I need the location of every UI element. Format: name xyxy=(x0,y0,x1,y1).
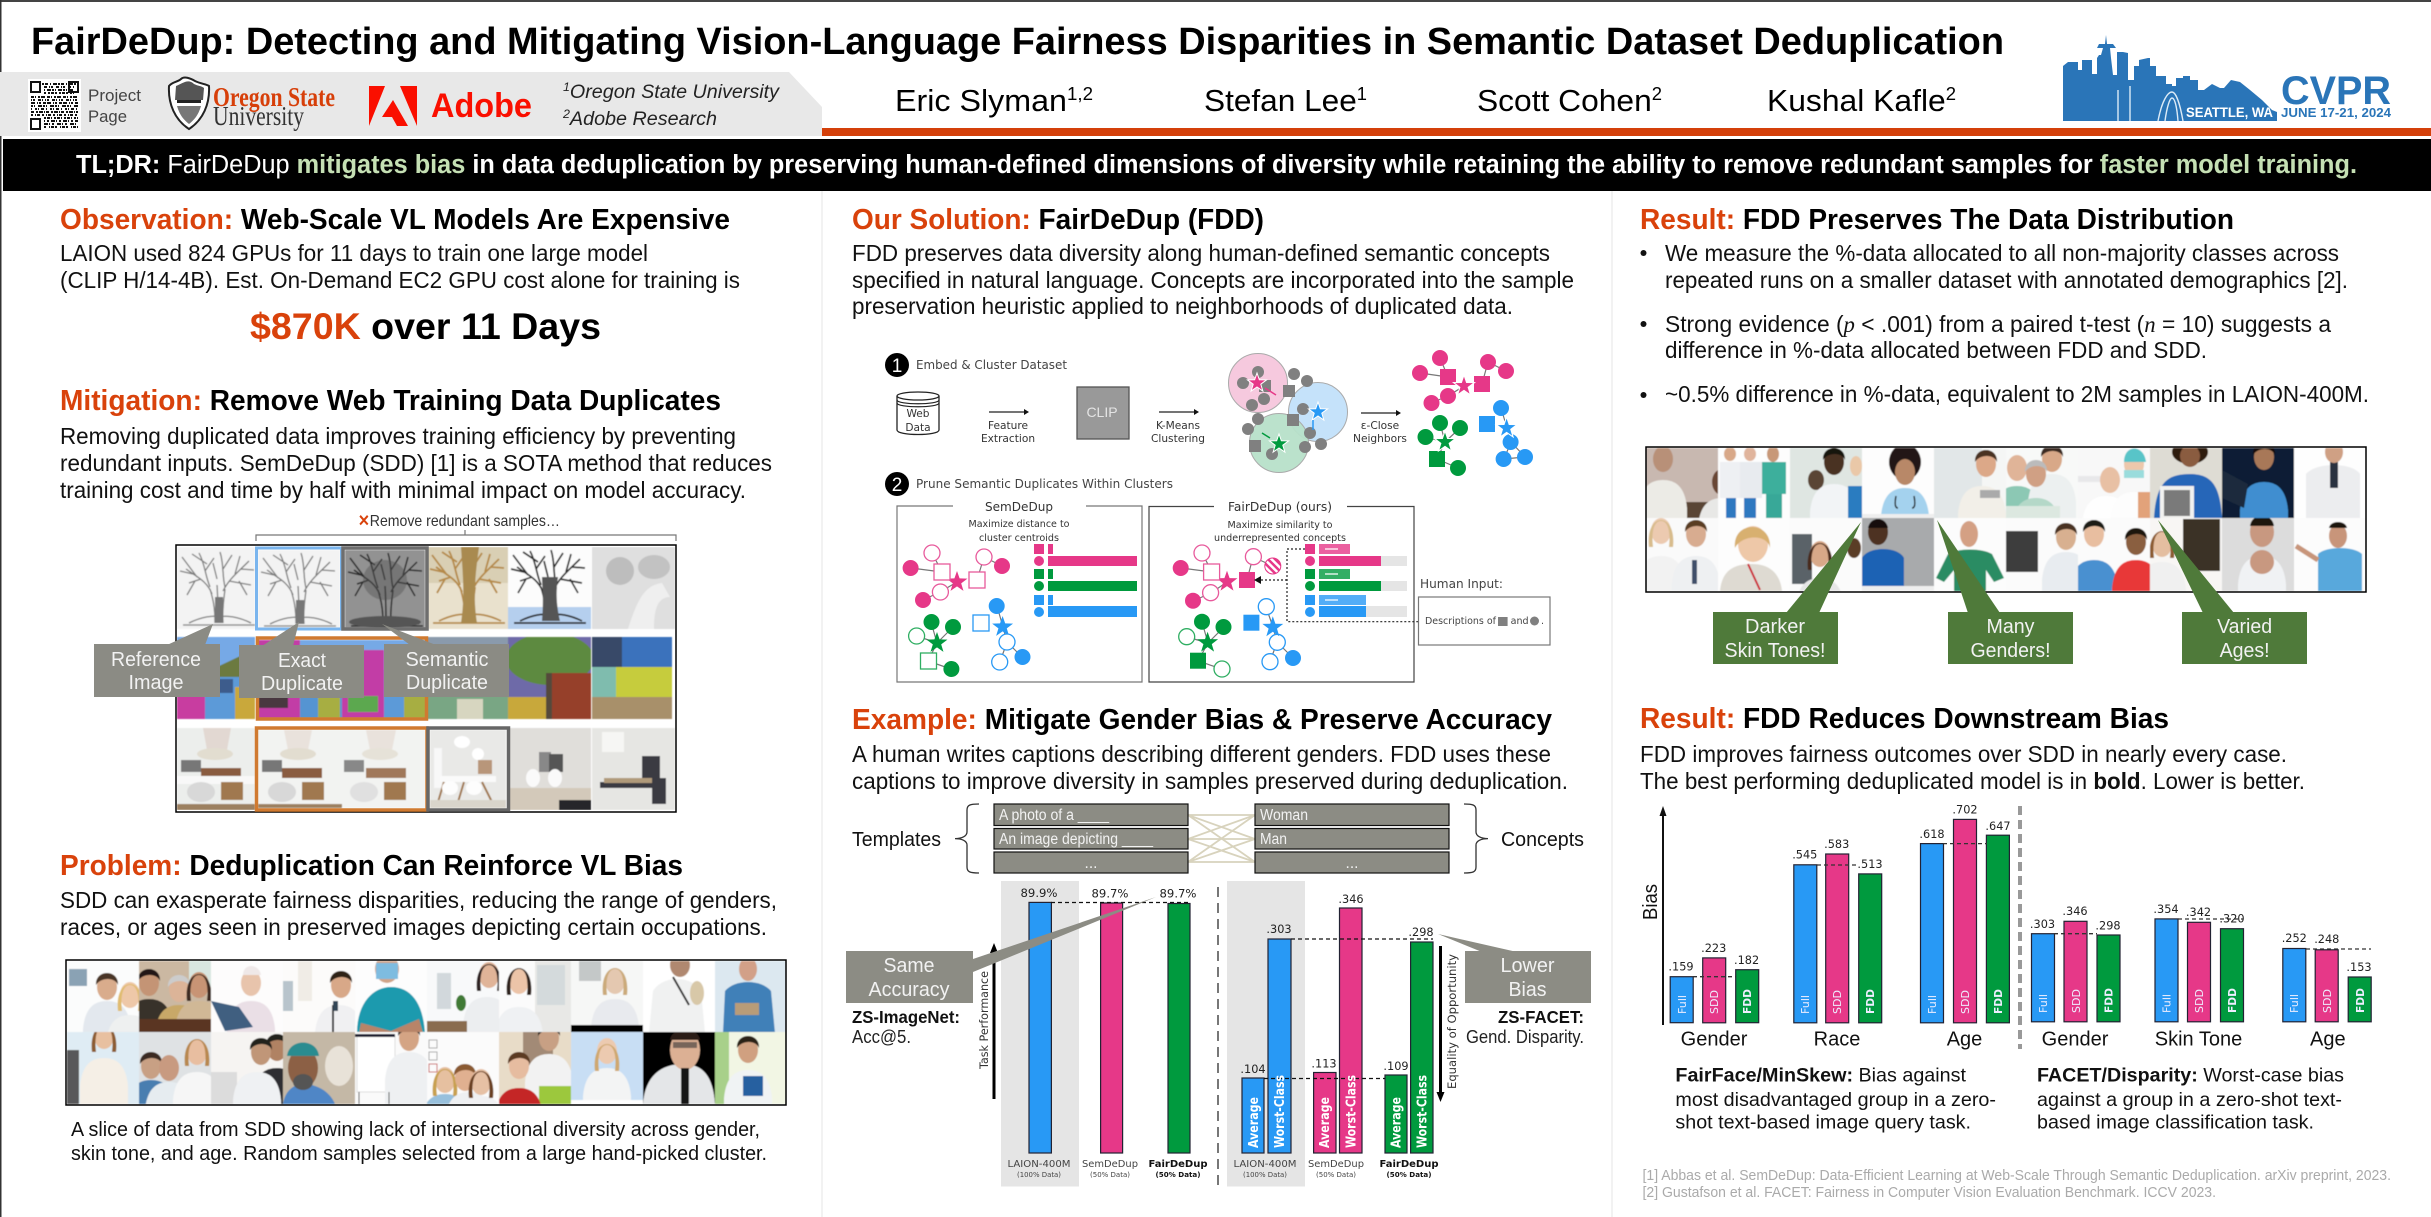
callout: darker skin tones: Darker xyxy=(1745,616,1805,638)
chart: fairness: .113 xyxy=(1311,1058,1337,1070)
chart: fairness: .298 xyxy=(1408,926,1434,939)
project page label xyxy=(88,86,141,126)
bullet list: difference in %-data allocated between FDD and SDD. xyxy=(1665,337,2207,363)
chart: FACET bars: FDD xyxy=(2226,988,2239,1013)
chart: FairFace bars: Age xyxy=(1947,1029,1982,1051)
bias result body: FDD improves fairness outcomes over SDD in nearly every case. xyxy=(1640,741,2287,767)
chart: FairFace bars: SDD xyxy=(1959,990,1972,1014)
chart: fairness: Average xyxy=(1390,1097,1404,1148)
chart: accuracy: 89.7% xyxy=(1160,887,1197,900)
chart: fairness: .346 xyxy=(1338,893,1364,906)
chart: fairness: Worst-Class xyxy=(1416,1075,1430,1148)
chart: FACET bars: SDD xyxy=(2193,989,2206,1013)
ZS-FACET label: ZS-FACET: xyxy=(1498,1007,1584,1027)
chart: FACET bars: Full xyxy=(2037,994,2050,1013)
arrow: k-means clustering xyxy=(1151,409,1205,445)
chart: FACET bars: Full xyxy=(2160,994,2174,1013)
project page label: Project xyxy=(88,86,141,105)
callout: exact duplicate: Duplicate xyxy=(261,673,343,695)
bias result body xyxy=(1640,741,2305,794)
authors: 2 xyxy=(1652,84,1662,104)
panel: observation xyxy=(60,204,740,347)
chart: fairness: .104 xyxy=(1240,1063,1266,1076)
chart: FACET bars xyxy=(2030,903,2372,1051)
chart: FACET bars: .298 xyxy=(2095,919,2121,932)
FairFace description: most disadvantaged group in a zero- xyxy=(1675,1089,1996,1111)
callout: exact duplicate: Exact xyxy=(278,650,326,672)
chart: FairFace bars: FDD xyxy=(1864,989,1877,1014)
icon: web data cylinder xyxy=(897,392,939,434)
chart: FairFace bars: .545 xyxy=(1792,849,1817,862)
concept boxes: Woman xyxy=(1260,807,1308,824)
arrow: equality of opportunity xyxy=(1436,946,1459,1102)
callout: reference image: Image xyxy=(128,672,184,694)
chart: fairness: LAION-400M xyxy=(1234,1159,1296,1170)
authors: Scott Cohen xyxy=(1477,83,1648,118)
chart: FACET bars: Skin Tone xyxy=(2155,1029,2242,1051)
panel: mitigation xyxy=(60,385,772,812)
arrow: k-means clustering: K-Means xyxy=(1156,420,1200,432)
photo caption xyxy=(71,1119,767,1165)
callout: darker skin tones xyxy=(1713,522,1861,664)
FairFace description: shot text-based image query task. xyxy=(1675,1112,1971,1134)
heading: problem: Problem: Deduplication Can Reinforce VL Bias xyxy=(60,850,683,882)
chart: accuracy xyxy=(1001,881,1208,1186)
redundant sample label with bracket: ✕Remove redundant samples… xyxy=(358,513,560,530)
chart: accuracy: FairDeDup xyxy=(1148,1159,1208,1170)
neighbor groups xyxy=(1412,350,1533,476)
template boxes: ... xyxy=(1085,855,1097,872)
chart: FairFace bars: .513 xyxy=(1857,858,1883,871)
authors: Stefan Lee xyxy=(1204,83,1354,118)
chart: FACET bars: FDD xyxy=(2354,988,2367,1013)
authors: Kushal Kafle xyxy=(1767,83,1941,118)
callout: lower bias: Lower xyxy=(1500,955,1555,977)
icon: web data cylinder: Data xyxy=(905,422,931,434)
heading: example: Example: Mitigate Gender Bias & Preserve Accuracy xyxy=(852,704,1552,736)
logo: CVPR Seattle: SEATTLE, WA xyxy=(2186,104,2273,120)
panel: SemDeDup diagram: Maximize distance to xyxy=(968,519,1070,530)
arrow: close neighbors xyxy=(1353,410,1407,445)
step 2 heading: Prune Semantic Duplicates Within Clusters xyxy=(916,477,1173,491)
clusters diagram xyxy=(1228,354,1348,472)
bullet list: repeated runs on a smaller dataset with annotated demographics [2]. xyxy=(1665,267,2348,293)
chart: fairness: (50% Data) xyxy=(1316,1171,1356,1179)
chart: fairness: Worst-Class xyxy=(1344,1075,1360,1148)
human input box: Descriptions of xyxy=(1425,616,1497,627)
chart: accuracy: LAION-400M xyxy=(1008,1159,1070,1170)
panel: SemDeDup diagram xyxy=(897,500,1142,682)
observation body: LAION used 824 GPUs for 11 days to train one large model xyxy=(60,240,648,266)
callout: semantic duplicate: Duplicate xyxy=(406,672,488,694)
bias axis: Bias xyxy=(1640,884,1662,920)
concept boxes: Man xyxy=(1260,831,1287,848)
chart: fairness: .109 xyxy=(1383,1060,1409,1073)
chart: FairFace bars: .702 xyxy=(1952,803,1978,816)
chart: FairFace bars: .159 xyxy=(1668,961,1694,974)
logo: CVPR Seattle: JUNE 17-21, 2024 xyxy=(2281,105,2392,120)
arrow: close neighbors: ε-Close xyxy=(1361,420,1399,432)
chart: FACET bars: .153 xyxy=(2346,961,2372,974)
TL;DR banner: TL;DR: FairDeDup mitigates bias in data deduplication by preserving human-defined dimensions of diversity while retaining the ability to remove redundant samples for faster model training. xyxy=(76,151,2357,179)
example body: captions to improve diversity in samples preserved during deduplication. xyxy=(852,768,1568,794)
solution body: preservation heuristic applied to neighborhoods of duplicated data. xyxy=(852,293,1513,319)
photo strip: FDD samples xyxy=(1637,440,2366,644)
icon: QR code xyxy=(28,79,81,132)
chart: fairness xyxy=(1227,881,1438,1186)
chart: accuracy: SemDeDup xyxy=(1082,1159,1138,1170)
logo: CVPR Seattle: CVPR xyxy=(2281,69,2391,113)
chart: FACET bars: .346 xyxy=(2062,905,2088,918)
chart: FACET bars: SDD xyxy=(2070,989,2083,1013)
chart: accuracy: (100% Data) xyxy=(1017,1171,1061,1179)
chart: accuracy: (50% Data) xyxy=(1156,1171,1200,1179)
bias result body: The best performing deduplicated model is in bold. Lower is better. xyxy=(1640,768,2305,794)
chart: accuracy: 89.7% xyxy=(1092,887,1129,900)
human input box: and xyxy=(1511,616,1529,627)
callout: same accuracy: Accuracy xyxy=(868,979,950,1001)
bullet list: We measure the %-data allocated to all non-majority classes across xyxy=(1665,240,2339,266)
example body: A human writes captions describing different genders. FDD uses these xyxy=(852,741,1551,767)
FairFace description xyxy=(1675,1065,1996,1134)
heading: result distribution: Result: FDD Preserves The Data Distribution xyxy=(1640,204,2234,236)
authors: 1,2 xyxy=(1067,84,1093,104)
chart: FairFace bars xyxy=(1668,803,2011,1051)
arrow: task performance xyxy=(977,943,998,1099)
chart: fairness: Average xyxy=(1318,1097,1333,1148)
authors: 2 xyxy=(1946,84,1956,104)
step 1 heading: Embed & Cluster Dataset xyxy=(916,358,1067,372)
image grid of duplicates xyxy=(176,545,676,812)
chart: FACET bars: Full xyxy=(2288,994,2301,1013)
bullet list: Strong evidence (p < .001) from a paired t-test (n = 10) suggests a xyxy=(1665,311,2331,337)
panel: SemDeDup diagram: SemDeDup xyxy=(985,500,1053,514)
chart: FairFace bars: .583 xyxy=(1824,838,1849,851)
problem body: SDD can exasperate fairness disparities, reducing the range of genders, xyxy=(60,887,777,913)
problem body: races, or ages seen in preserved images depicting certain occupations. xyxy=(60,914,767,940)
panel: FairDeDup diagram xyxy=(1149,500,1418,682)
mitigation body xyxy=(60,423,772,503)
authors: Eric Slyman xyxy=(895,83,1060,118)
callout: varied ages: Ages! xyxy=(2220,640,2270,662)
chart: FACET bars: Gender xyxy=(2042,1029,2109,1051)
FACET description xyxy=(2037,1065,2344,1134)
photo caption: A slice of data from SDD showing lack of intersectional diversity across gender, xyxy=(71,1119,760,1141)
ZS-ImageNet label: Acc@5. xyxy=(852,1027,911,1047)
solution body: specified in natural language. Concepts are incorporated into the sample xyxy=(852,267,1574,293)
bullet list xyxy=(1640,240,2369,407)
solution body xyxy=(852,240,1574,319)
chart: FairFace bars: .618 xyxy=(1919,828,1945,841)
callout: semantic duplicate xyxy=(382,624,509,697)
chart: accuracy: 89.9% xyxy=(1020,887,1058,900)
concepts label with brace: Concepts xyxy=(1501,829,1584,851)
arrow: k-means clustering: Clustering xyxy=(1151,433,1205,445)
mitigation body: Removing duplicated data improves training efficiency by preventing xyxy=(60,423,736,449)
chart: FACET bars: .354 xyxy=(2153,903,2179,916)
heading: result bias: Result: FDD Reduces Downstream Bias xyxy=(1640,703,2169,735)
callout: many genders: Genders! xyxy=(1970,640,2050,662)
connection lines xyxy=(1188,815,1255,862)
logo: Adobe: Adobe xyxy=(431,87,532,125)
templates label with brace: Templates xyxy=(852,829,941,851)
panel: FairDeDup diagram: underrepresented concepts xyxy=(1214,533,1346,544)
mitigation body: training cost and time by half with minimal impact on model accuracy. xyxy=(60,477,746,503)
chart: fairness: Average xyxy=(1247,1097,1262,1148)
chart: FairFace bars: .647 xyxy=(1985,820,2011,833)
heading: observation: Observation: Web-Scale VL Models Are Expensive xyxy=(60,204,730,236)
panel: result downstream bias xyxy=(1640,703,2391,1201)
affiliations xyxy=(562,80,781,130)
chart: accuracy: (50% Data) xyxy=(1090,1171,1130,1179)
chart: FACET bars: .248 xyxy=(2314,933,2339,946)
chart: FACET bars: .303 xyxy=(2030,918,2055,931)
FairFace description: FairFace/MinSkew: Bias against xyxy=(1675,1065,1967,1087)
CLIP box xyxy=(1077,387,1129,439)
chart: FACET bars: .320 xyxy=(2219,913,2245,926)
chart: FairFace bars: FDD xyxy=(1741,989,1754,1014)
arrow: feature extraction xyxy=(981,409,1035,445)
step 1 heading: 1 xyxy=(892,356,902,377)
TL;DR banner xyxy=(3,139,2431,191)
affiliations: Adobe Research xyxy=(569,109,717,130)
observation body xyxy=(60,240,740,293)
CLIP box: CLIP xyxy=(1086,404,1118,420)
panel: result data distribution xyxy=(1637,204,2369,664)
authors: 1 xyxy=(1357,84,1367,104)
references: [2] Gustafson et al. FACET: Fairness in Computer Vision Evaluation Benchmark. ICCV 2023. xyxy=(1642,1184,2216,1201)
solution body: FDD preserves data diversity along human-defined semantic concepts xyxy=(852,240,1550,266)
chart: fairness: SemDeDup xyxy=(1308,1159,1364,1170)
chart: FairFace bars: SDD xyxy=(1831,990,1844,1014)
observation body: (CLIP H/14-4B). Est. On-Demand EC2 GPU cost alone for training is xyxy=(60,267,740,293)
templates label with brace xyxy=(852,804,979,873)
concepts label with brace xyxy=(1464,804,1584,873)
FACET description: against a group in a zero-shot text- xyxy=(2037,1089,2342,1111)
arrow: close neighbors: Neighbors xyxy=(1353,433,1407,445)
affiliations: Oregon State University xyxy=(570,82,781,103)
human input box xyxy=(1418,577,1550,645)
callout: many genders xyxy=(1937,520,2073,664)
FACET description: based image classification task. xyxy=(2037,1112,2314,1134)
title: FairDeDup: Detecting and Mitigating Vision-Language Fairness Disparities in Semantic Dataset Deduplication xyxy=(31,21,2004,63)
chart: fairness: (100% Data) xyxy=(1243,1171,1287,1179)
callout: lower bias xyxy=(1438,934,1591,1003)
chart: FairFace bars: .182 xyxy=(1734,954,1759,967)
callout: semantic duplicate: Semantic xyxy=(406,649,488,671)
chart: FairFace bars: FDD xyxy=(1992,989,2005,1014)
chart: FairFace bars: Race xyxy=(1814,1029,1860,1051)
photo caption: skin tone, and age. Random samples selected from a large hand-picked cluster. xyxy=(71,1143,767,1165)
panel: our solution xyxy=(852,204,1574,682)
logo: Adobe xyxy=(369,86,532,126)
concept boxes: ... xyxy=(1346,855,1358,872)
ZS-FACET label: Gend. Disparity. xyxy=(1466,1027,1584,1047)
cost callout: $870K over 11 Days xyxy=(250,306,601,347)
callout: darker skin tones: Skin Tones! xyxy=(1724,640,1826,662)
arrow: feature extraction: Extraction xyxy=(981,433,1035,445)
FACET description: FACET/Disparity: Worst-case bias xyxy=(2037,1065,2344,1087)
panel: FairDeDup diagram: Maximize similarity to xyxy=(1228,520,1333,531)
bias axis xyxy=(1640,806,1666,1025)
affiliations: 2 xyxy=(562,107,570,121)
bullet list: ~0.5% difference in %-data, equivalent to 2M samples in LAION-400M. xyxy=(1665,381,2369,407)
chart: FACET bars: SDD xyxy=(2321,989,2334,1013)
human input box: Human Input: xyxy=(1420,577,1503,591)
references: [1] Abbas et al. SemDeDup: Data-Efficient Learning at Web-Scale Through Semantic Deduplication. arXiv preprint, 2023. xyxy=(1642,1167,2391,1184)
chart: FACET bars: .252 xyxy=(2282,932,2307,945)
redundant sample label with bracket xyxy=(256,513,676,541)
callout: lower bias: Bias xyxy=(1508,979,1546,1001)
ZS-ImageNet label: ZS-ImageNet: xyxy=(852,1007,960,1027)
callout: varied ages: Varied xyxy=(2217,616,2272,638)
chart: FairFace bars: SDD xyxy=(1708,990,1721,1014)
callout: exact duplicate xyxy=(239,622,364,698)
ZS-ImageNet label xyxy=(852,1007,960,1047)
callout: many genders: Many xyxy=(1986,616,2034,638)
logo: Oregon State University: University xyxy=(213,101,304,131)
template boxes: A photo of a ____ xyxy=(999,807,1109,824)
human input box: . xyxy=(1541,616,1544,627)
heading: our solution: Our Solution: FairDeDup (FDD) xyxy=(852,204,1264,236)
step 2 heading: 2 xyxy=(892,475,902,496)
ZS-FACET label xyxy=(1466,1007,1584,1047)
arrow: task performance: Task Performance xyxy=(977,971,991,1070)
callout: reference image xyxy=(94,624,220,697)
orange rule xyxy=(822,128,2431,136)
template boxes xyxy=(994,804,1188,873)
callout: same accuracy xyxy=(846,897,1156,1003)
chart: FairFace bars: Full xyxy=(1799,995,1812,1014)
references xyxy=(1642,1167,2391,1201)
icon: web data cylinder: Web xyxy=(906,408,930,420)
panel: SemDeDup diagram: cluster centroids xyxy=(979,533,1059,544)
chart: FACET bars: Age xyxy=(2310,1029,2346,1051)
header logo band xyxy=(0,72,822,136)
chart: fairness: (50% Data) xyxy=(1386,1171,1432,1179)
callout: reference image: Reference xyxy=(111,649,201,671)
chart: fairness: FairDeDup xyxy=(1380,1159,1438,1170)
authors xyxy=(895,83,1956,118)
project page label: Page xyxy=(88,107,127,126)
logo: Oregon State University: Oregon State xyxy=(213,82,335,112)
affiliations: 1 xyxy=(563,80,570,94)
arrow: equality of opportunity: Equality of Opportunity xyxy=(1445,954,1459,1089)
panel: FairDeDup diagram: FairDeDup (ours) xyxy=(1228,500,1332,514)
photo strip: SDD samples xyxy=(66,953,786,1162)
example body xyxy=(852,741,1568,794)
template boxes: An image depicting ____ xyxy=(999,831,1153,848)
mitigation body: redundant inputs. SemDeDup (SDD) [1] is a SOTA method that reduces xyxy=(60,450,772,476)
chart: fairness: .303 xyxy=(1266,923,1292,936)
heading: mitigation: Mitigation: Remove Web Training Data Duplicates xyxy=(60,385,721,417)
callout: varied ages xyxy=(2158,520,2307,664)
chart: FairFace bars: .223 xyxy=(1701,942,1726,955)
panel: example xyxy=(846,704,1591,1186)
concept boxes xyxy=(1255,804,1449,873)
chart: FairFace bars: Full xyxy=(1676,995,1689,1014)
dashed chart divider xyxy=(1217,887,1219,1186)
problem body xyxy=(60,887,777,940)
step 1 heading xyxy=(885,353,1067,377)
chart: fairness: Worst-Class xyxy=(1273,1075,1288,1148)
callout: same accuracy: Same xyxy=(884,955,934,977)
logo: CVPR Seattle xyxy=(2063,35,2392,121)
step 2 heading xyxy=(885,472,1173,496)
chart: FACET bars: FDD xyxy=(2102,988,2116,1013)
arrow: feature extraction: Feature xyxy=(988,420,1028,432)
logo: Oregon State University xyxy=(169,78,335,131)
chart: FairFace bars: Full xyxy=(1926,995,1939,1014)
chart: FACET bars: .342 xyxy=(2186,906,2211,919)
dashed divider between metric groups xyxy=(2018,806,2022,1049)
panel: problem xyxy=(60,850,786,1165)
chart: FairFace bars: Gender xyxy=(1681,1029,1748,1051)
